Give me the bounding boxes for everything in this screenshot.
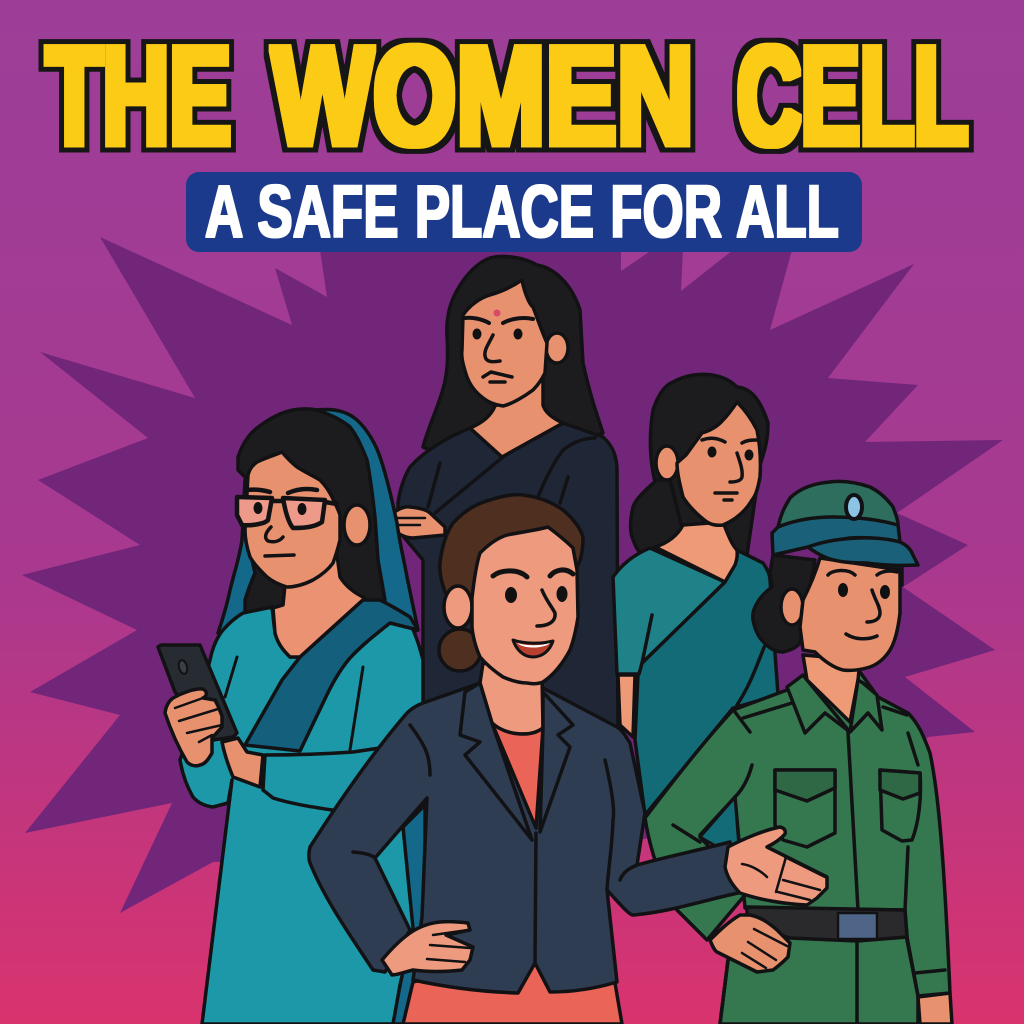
belt bbox=[747, 907, 907, 941]
phone camera bbox=[177, 659, 189, 675]
neck bbox=[470, 380, 563, 457]
ear bbox=[344, 505, 370, 545]
wrist bbox=[222, 738, 263, 787]
left pocket flap bbox=[775, 770, 835, 801]
title bbox=[46, 17, 968, 174]
hair bbox=[440, 495, 583, 615]
officer hand bbox=[710, 915, 790, 972]
face bbox=[472, 527, 578, 684]
left lapel bbox=[460, 683, 532, 840]
cap band bbox=[772, 517, 900, 555]
face bbox=[800, 558, 900, 670]
collar bbox=[787, 675, 882, 733]
saree bbox=[398, 423, 618, 735]
veil bbox=[218, 409, 418, 680]
banner background bbox=[186, 172, 862, 252]
ponytail bbox=[631, 480, 685, 552]
face bbox=[462, 280, 547, 406]
phone hand bbox=[165, 689, 222, 766]
trousers bbox=[720, 935, 918, 1024]
neck bbox=[273, 555, 365, 657]
phone body bbox=[158, 645, 237, 740]
hip hand bbox=[382, 922, 473, 975]
figure: police officer bbox=[645, 481, 952, 1024]
neck bbox=[803, 655, 860, 722]
dress strip bbox=[392, 805, 425, 1024]
blazer creases bbox=[353, 725, 637, 963]
subtitle banner bbox=[186, 170, 862, 253]
cap brim bbox=[808, 538, 918, 565]
facial features bbox=[828, 570, 897, 639]
figure: front woman in blazer bbox=[309, 495, 827, 1024]
hair bbox=[423, 256, 603, 460]
sleeve and shoulder bbox=[613, 548, 725, 674]
neck bbox=[480, 663, 543, 734]
facial features bbox=[702, 438, 757, 500]
arm bbox=[618, 675, 635, 737]
ear bbox=[444, 586, 472, 628]
hair bbox=[238, 409, 385, 640]
ear bbox=[781, 589, 803, 625]
folded hand bbox=[393, 507, 445, 538]
title word: WOMEN: WOMEN bbox=[272, 17, 694, 174]
blazer bbox=[309, 683, 738, 993]
starburst bbox=[22, 237, 1003, 913]
smile bbox=[513, 640, 553, 657]
blouse bbox=[492, 723, 543, 828]
eyes bbox=[465, 318, 533, 382]
glasses bbox=[237, 497, 337, 528]
figure: woman in dark saree bbox=[393, 256, 618, 735]
left pocket bbox=[775, 770, 835, 847]
skin below cuff bbox=[918, 993, 952, 1024]
phone bbox=[158, 645, 237, 740]
cap badge bbox=[846, 495, 862, 519]
hair bun bbox=[753, 555, 815, 652]
forearm bbox=[263, 745, 400, 812]
facial features bbox=[247, 489, 317, 556]
face bbox=[677, 402, 760, 525]
ear bbox=[546, 333, 568, 363]
skirt bbox=[403, 950, 622, 1024]
figure: woman with phone and glasses bbox=[158, 409, 425, 1024]
right pocket flap bbox=[880, 770, 920, 799]
belt buckle bbox=[838, 913, 877, 939]
hair right bbox=[885, 560, 902, 585]
right lapel bbox=[540, 692, 573, 832]
teeth bbox=[517, 643, 550, 648]
hair bbox=[640, 374, 768, 560]
bindi bbox=[494, 310, 500, 316]
title word: THE: THE bbox=[46, 17, 231, 174]
sash bbox=[245, 600, 418, 751]
body bbox=[635, 550, 778, 815]
neck bbox=[655, 522, 737, 582]
dress bbox=[180, 607, 423, 1024]
figure: woman in teal saree bbox=[613, 374, 778, 815]
arm and shirt bbox=[645, 672, 950, 996]
right pocket bbox=[880, 770, 921, 841]
hair bun bbox=[439, 629, 481, 671]
teal gap under arm bbox=[700, 797, 742, 885]
facial features bbox=[493, 570, 573, 626]
dress creases bbox=[225, 657, 363, 750]
face bbox=[245, 452, 340, 587]
shirt lines bbox=[673, 703, 945, 1024]
extended hand bbox=[725, 827, 827, 905]
cap crown bbox=[778, 481, 898, 527]
ear bbox=[656, 446, 678, 480]
saree folds bbox=[428, 438, 595, 513]
